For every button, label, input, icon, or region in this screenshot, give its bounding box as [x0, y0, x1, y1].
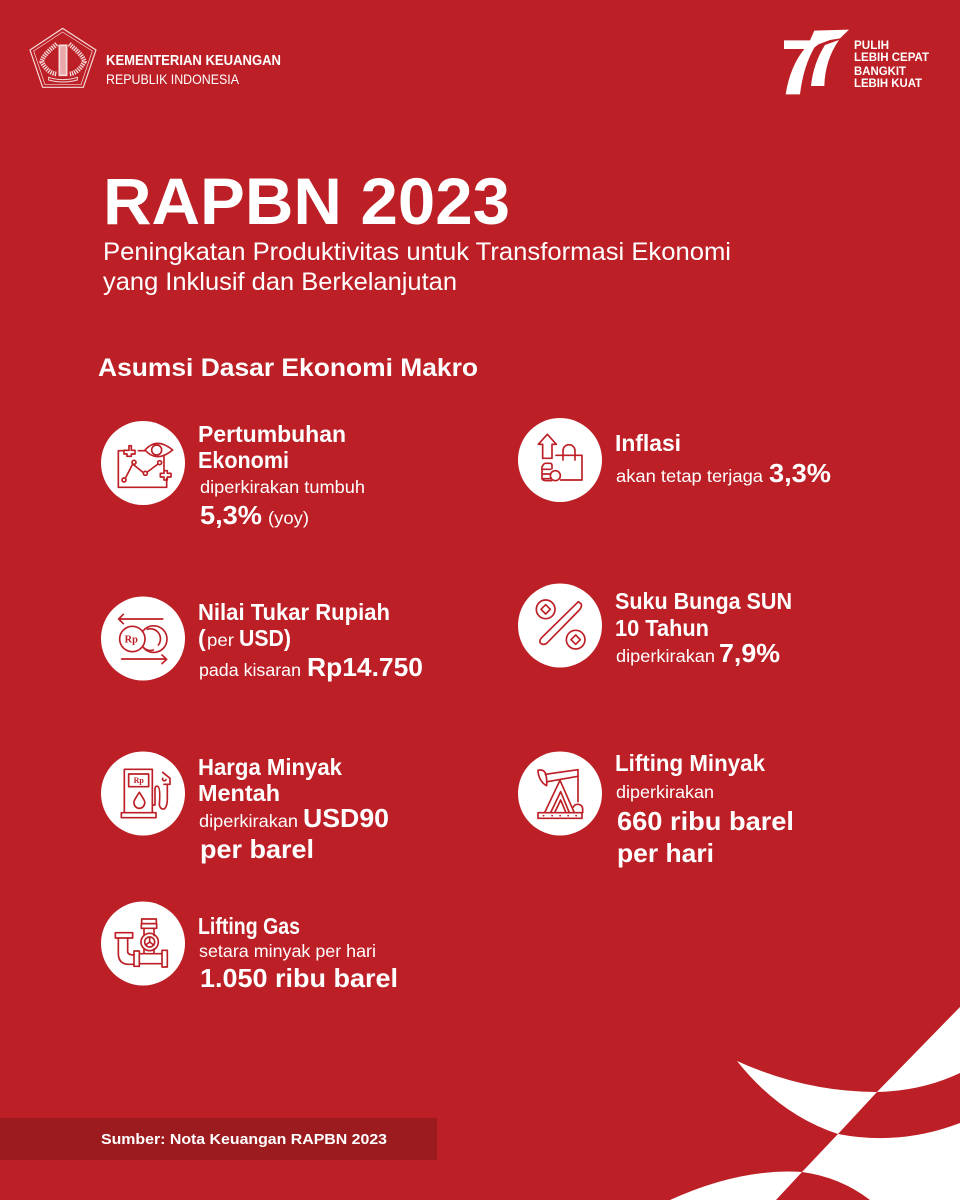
text: per barel: [200, 834, 314, 864]
text: 1.050 ribu barel: [200, 963, 398, 993]
icon: shopping bag, coins and up arrow: [518, 418, 602, 502]
decorative corner shapes: [670, 1007, 960, 1200]
text: Lifting Gas: [198, 913, 300, 939]
slogan: LEBIH CEPAT: [854, 52, 929, 64]
text: Mentah: [198, 780, 280, 806]
text: diperkirakan tumbuh: [200, 477, 365, 497]
panel: Harga Minyak Mentah: [101, 752, 389, 864]
text: diperkirakan: [199, 811, 298, 831]
icon: percent sign with coins: [518, 584, 602, 668]
panel: Lifting Gas: [101, 902, 398, 993]
text: 660 ribu barel: [617, 806, 794, 836]
icon: oil pumpjack: [518, 752, 602, 836]
subtitle: yang Inklusif dan Berkelanjutan: [103, 268, 457, 296]
logo: Kementerian Keuangan: [30, 28, 281, 87]
text: Inflasi: [615, 430, 681, 456]
ministry name: KEMENTERIAN KEUANGAN: [106, 53, 281, 69]
panel: Lifting Minyak: [518, 750, 794, 868]
title: RAPBN 2023: [103, 164, 510, 238]
republic name: REPUBLIK INDONESIA: [106, 72, 239, 87]
text: akan tetap terjaga: [616, 466, 763, 486]
source bar: [0, 1118, 437, 1160]
text: (: [198, 625, 206, 651]
text: Suku Bunga SUN: [615, 588, 792, 614]
text: Harga Minyak: [198, 754, 342, 780]
text: [615, 588, 792, 668]
text: Pertumbuhan: [198, 421, 346, 447]
text: USD): [239, 625, 291, 651]
text: diperkirakan: [616, 782, 714, 802]
icon: fuel pump: [101, 752, 185, 836]
icon: 77 mark: [784, 30, 849, 94]
icon: fuel pump: Rp: [134, 776, 144, 785]
panel: Suku Bunga SUN: [518, 584, 792, 668]
text: [198, 913, 398, 993]
subtitle: Peningkatan Produktivitas untuk Transformasi Ekonomi: [103, 238, 731, 266]
icon: growth chart with eye: [101, 421, 185, 505]
text: 7,9%: [719, 638, 780, 668]
text: 5,3%: [200, 500, 262, 530]
text: Lifting Minyak: [615, 750, 765, 776]
text: setara minyak per hari: [199, 941, 376, 961]
text: Ekonomi: [198, 447, 289, 473]
text: 3,3%: [769, 458, 831, 488]
section heading: Asumsi Dasar Ekonomi Makro: [98, 354, 478, 382]
source text: Sumber: Nota Keuangan RAPBN 2023: [101, 1131, 387, 1148]
icon: pentagon emblem: [30, 28, 96, 87]
text: [198, 599, 423, 682]
text: (yoy): [268, 508, 309, 528]
text: diperkirakan: [616, 646, 715, 666]
text: Nilai Tukar Rupiah: [198, 599, 390, 625]
text: [198, 421, 365, 530]
logo: HUT RI 77: [784, 30, 929, 94]
slogan: LEBIH KUAT: [854, 78, 922, 90]
text: [615, 750, 794, 868]
text: 10 Tahun: [615, 615, 709, 641]
text: [198, 754, 389, 864]
text: [615, 430, 831, 488]
slogan: PULIH: [854, 40, 889, 52]
text: pada kisaran: [199, 660, 301, 680]
icon: currency exchange: Rp: [125, 635, 138, 646]
panel: Inflasi: [518, 418, 831, 502]
text: Rp14.750: [307, 652, 423, 682]
text: per: [207, 630, 234, 650]
text: USD90: [303, 803, 389, 833]
panel: Pertumbuhan Ekonomi: [101, 421, 365, 530]
slogan: [854, 40, 929, 90]
icon: pipe valve: [101, 902, 185, 986]
slogan: BANGKIT: [854, 66, 906, 78]
icon: currency exchange: [101, 596, 185, 680]
subtitle: [103, 238, 731, 296]
panel: Nilai Tukar Rupiah: [101, 596, 423, 682]
text: per hari: [617, 838, 714, 868]
